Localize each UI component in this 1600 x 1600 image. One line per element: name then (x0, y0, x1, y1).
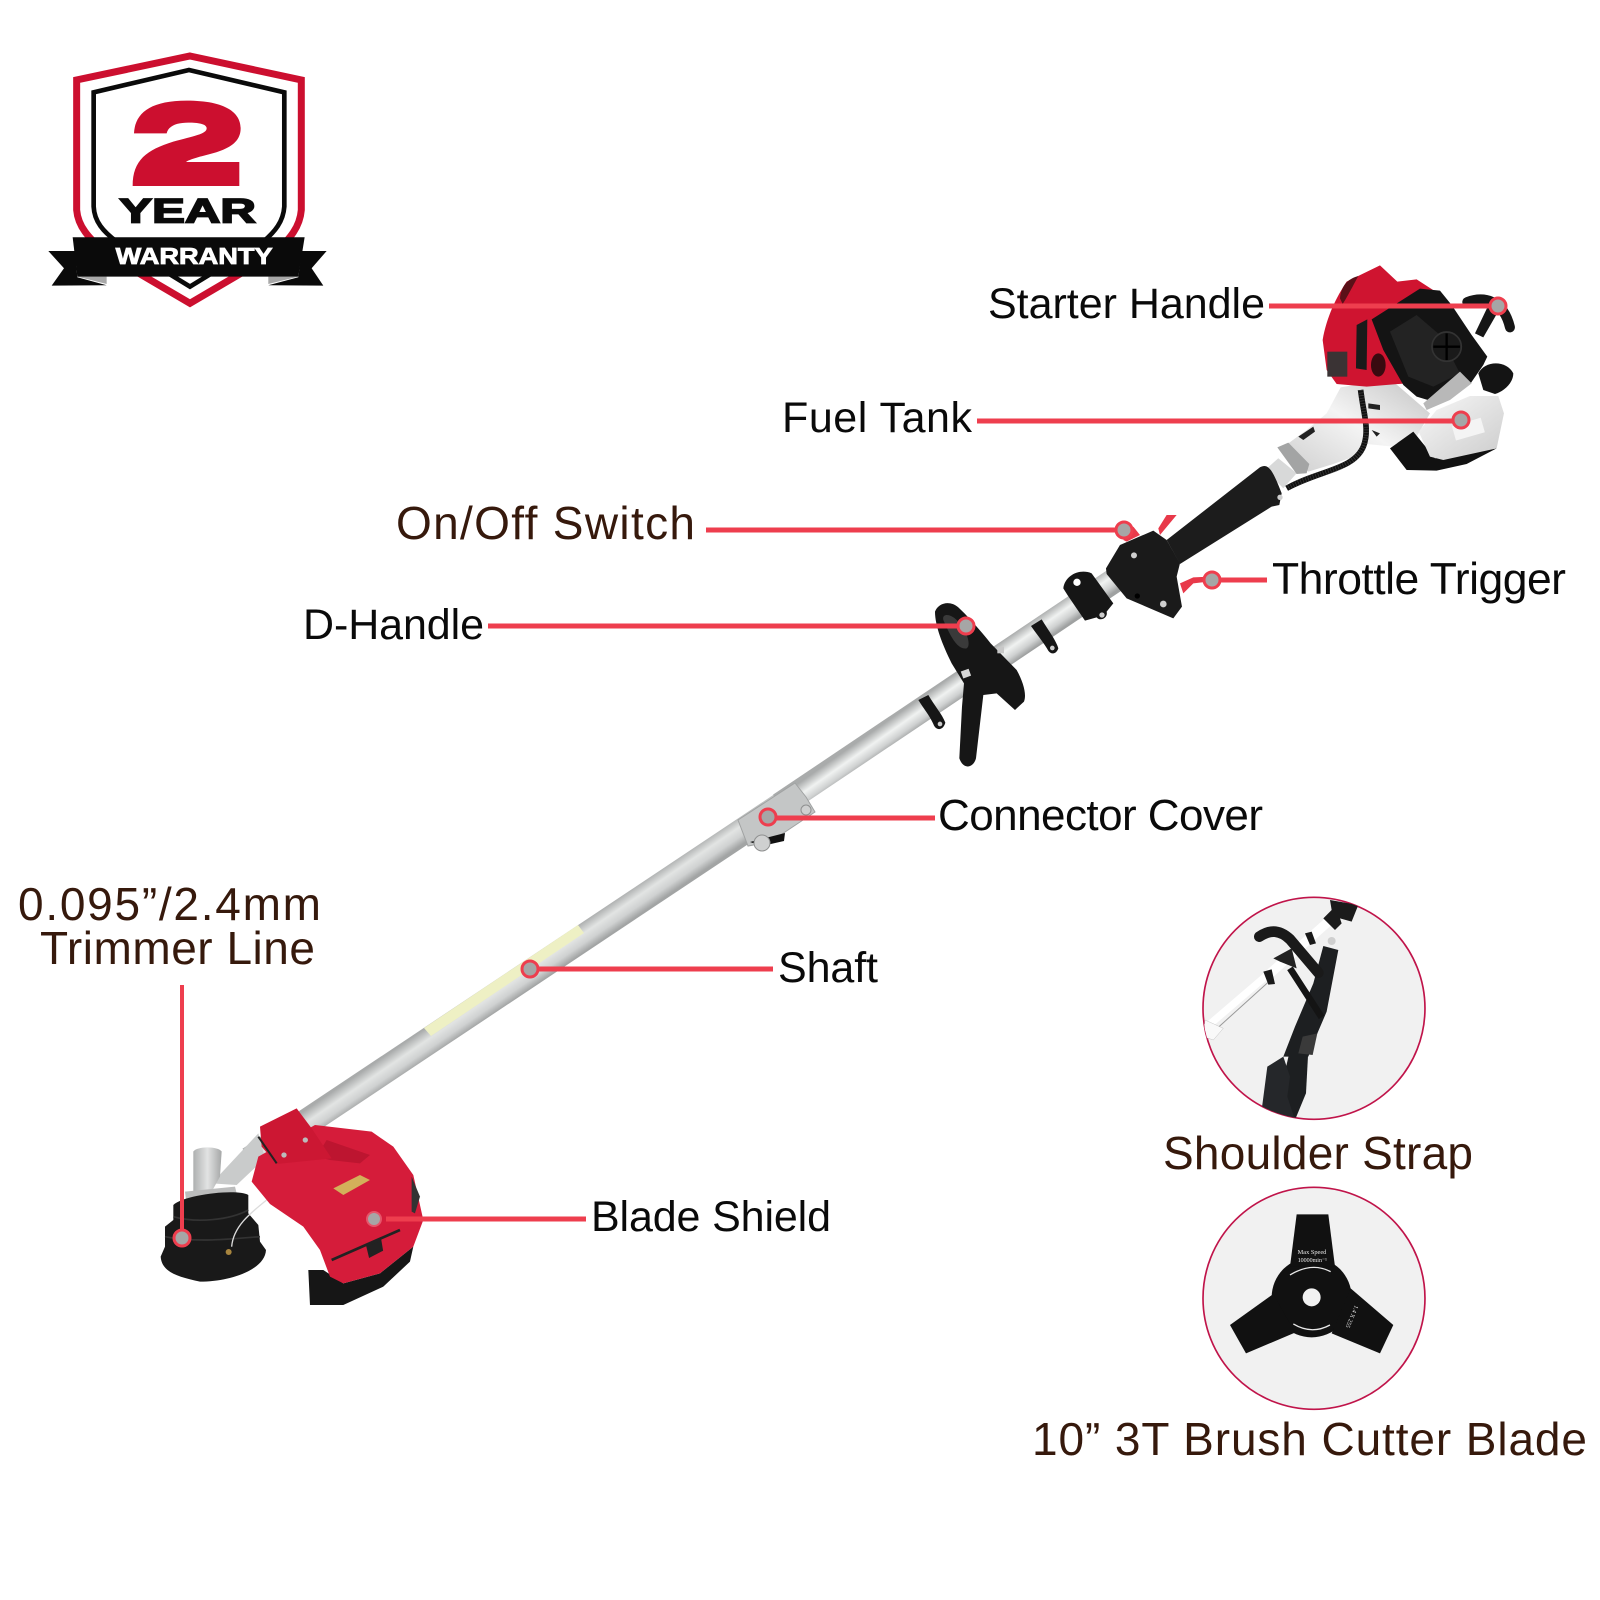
handle plate and triggers (1106, 515, 1210, 618)
label: 10” 3T Brush Cutter Blade: 10” 3T Brush Cutter Blade (1032, 1413, 1587, 1465)
callout: Fuel Tank: Fuel Tank (782, 394, 972, 442)
callout: D-Handle: D-Handle (303, 601, 484, 649)
WARRANTY text: WARRANTY (116, 243, 273, 269)
red cover (1323, 265, 1443, 387)
product: brush cutter (161, 265, 1513, 1305)
callout: Shaft: Shaft (778, 944, 878, 992)
connector clamp (738, 783, 815, 851)
label: Shoulder Strap: Shoulder Strap (1163, 1127, 1473, 1179)
trimmer spool (161, 1192, 266, 1282)
YEAR text: YEAR (119, 193, 256, 231)
callout: Starter Handle (988, 280, 1506, 328)
callout: Blade Shield: Blade Shield (591, 1193, 831, 1241)
callout: On/Off Switch (396, 497, 1132, 549)
blade shield skirt (308, 1247, 413, 1305)
inset: brush cutter blade (1203, 1187, 1425, 1409)
fuel tank (1390, 432, 1497, 471)
warranty badge (48, 56, 327, 303)
inset: brush cutter blade: 10000min⁻¹ (1298, 1258, 1327, 1264)
coil cable (1287, 390, 1366, 488)
callout: Trimmer Line: 0.095”/2.4mm (18, 878, 321, 930)
engine head (1167, 265, 1513, 564)
callout: Connector Cover (760, 791, 1263, 840)
handle (1259, 932, 1318, 973)
callout: Trimmer Line: Trimmer Line (40, 922, 315, 974)
top grip (1323, 900, 1358, 930)
shaft upper (780, 580, 1115, 805)
numeral 2 (133, 101, 241, 186)
grip (1167, 466, 1282, 564)
callout: On/Off Switch: On/Off Switch (396, 497, 695, 549)
white neck housing (1288, 382, 1430, 472)
shield outline (77, 56, 301, 303)
starter handle (1467, 299, 1510, 337)
shaft lower (250, 800, 790, 1160)
callout: Throttle Trigger: Throttle Trigger (1272, 555, 1566, 604)
gearbox silver (212, 1133, 265, 1185)
callout: Connector Cover: Connector Cover (938, 791, 1263, 840)
inset: shoulder strap (1200, 897, 1425, 1120)
callout: Starter Handle: Starter Handle (988, 280, 1265, 328)
shaft in inset (1200, 974, 1268, 1033)
silver carburetor (1423, 372, 1472, 410)
tube and clamp (1265, 458, 1297, 488)
callout: Fuel Tank (782, 394, 1469, 442)
cutting head (161, 1108, 423, 1305)
blade (1230, 1214, 1393, 1353)
black engine block (1372, 289, 1487, 402)
callout: Shaft (522, 944, 878, 992)
callout: D-Handle (303, 601, 974, 649)
callout: Blade Shield (367, 1193, 831, 1241)
d-handle (918, 572, 1113, 766)
blade shield (252, 1125, 423, 1283)
callout: Trimmer Line (18, 878, 321, 1246)
fuel cap (1478, 363, 1513, 394)
ribbon (48, 237, 327, 286)
blade text: Max Speed (1298, 1249, 1327, 1256)
inset: brush cutter blade: 1.4 X 255 (1344, 1304, 1359, 1328)
strap (1262, 946, 1338, 1120)
